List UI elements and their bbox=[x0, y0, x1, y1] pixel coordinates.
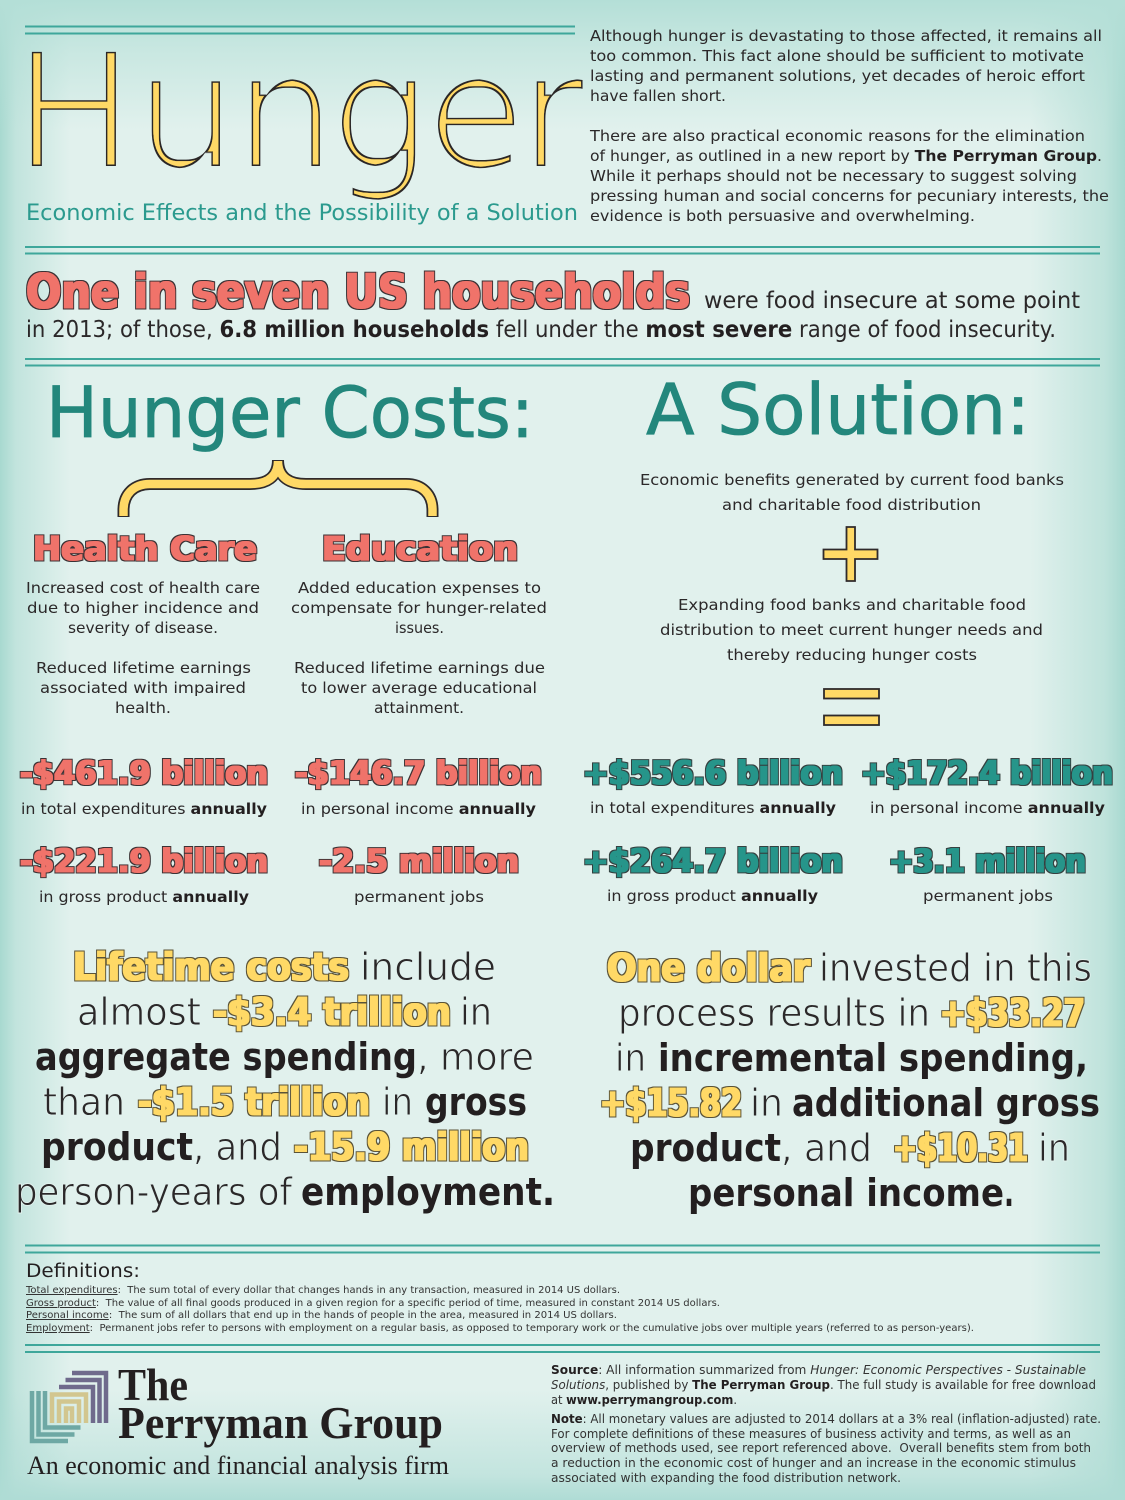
expansion text: Expanding food banks and charitable food bbox=[678, 596, 1026, 614]
callout: lifetime costs: in bbox=[460, 990, 492, 1034]
heading: Hunger Costs: Hunger Costs: bbox=[46, 372, 534, 454]
education description: to lower average educational bbox=[301, 679, 537, 697]
stat: personal income cost bbox=[295, 754, 542, 818]
source and note: at www.perrymangroup.com. bbox=[551, 1393, 737, 1407]
definition list: Total expenditures: The sum total of every dollar that changes hands in any transaction, measured in 2014 US dollars. bbox=[25, 1285, 620, 1296]
stat: gross product gain: in gross product annually bbox=[607, 887, 818, 905]
source and note: Solutions, published by The Perryman Group. The full study is available for free download bbox=[551, 1378, 1096, 1392]
health care description: severity of disease. bbox=[68, 619, 218, 637]
callout: lifetime costs: person-years of bbox=[15, 1170, 294, 1214]
health care description: Reduced lifetime earnings bbox=[36, 659, 251, 677]
education description: compensate for hunger-related bbox=[291, 599, 547, 617]
callout: one dollar: +$33.27 bbox=[940, 991, 1085, 1035]
callout: one dollar: +$15.82 bbox=[600, 1081, 742, 1125]
definition list: Personal income: The sum of all dollars that end up in the hands of people in the area, measured in 2014 US dollars. bbox=[26, 1310, 617, 1321]
stat: total expenditures gain: in total expenditures annually bbox=[590, 799, 836, 817]
title: Hunger: Hunger bbox=[13, 19, 586, 207]
subtitle: Economic Effects and the Possibility of a Solution bbox=[26, 200, 578, 226]
callout: lifetime costs bbox=[15, 945, 555, 1214]
intro text block: evidence is both persuasive and overwhelming. bbox=[590, 207, 975, 225]
definition list: Employment: Permanent jobs refer to persons with employment on a regular basis, as opposed to temporary work or the cumulative jobs over multiple years (referred to as person-years). bbox=[26, 1323, 974, 1334]
stat: total expenditures cost: -$461.9 billion bbox=[20, 754, 268, 792]
stat: personal income gain bbox=[861, 754, 1113, 817]
callout: lifetime costs: -$3.4 trillion bbox=[213, 990, 451, 1034]
wordmark: The bbox=[118, 1360, 188, 1410]
intro text block: lasting and permanent solutions, yet decades of heroic effort bbox=[590, 67, 1085, 85]
intro text block: While it perhaps should not be necessary to suggest solving bbox=[590, 167, 1077, 185]
expansion text: distribution to meet current hunger needs and bbox=[660, 621, 1043, 639]
callout: lifetime costs: than bbox=[43, 1080, 125, 1124]
logo: The Perryman Group bbox=[27, 1360, 449, 1480]
education description bbox=[291, 579, 547, 717]
education description: attainment. bbox=[374, 699, 464, 717]
icon: plus bbox=[824, 527, 878, 581]
wordmark bbox=[27, 1360, 449, 1480]
expansion text bbox=[660, 596, 1043, 664]
callout: lifetime costs: in bbox=[382, 1080, 413, 1124]
stat: total expenditures cost: in total expenditures annually bbox=[21, 800, 267, 818]
wordmark: Perryman Group bbox=[118, 1398, 443, 1448]
stat: gross product gain bbox=[583, 842, 843, 905]
headline statistic: were food insecure at some point bbox=[704, 288, 1080, 314]
callout: one dollar: process results in bbox=[618, 991, 930, 1035]
stat: jobs cost: permanent jobs bbox=[354, 888, 484, 906]
panel: hunger costs bbox=[15, 372, 555, 1214]
wordmark: An economic and financial analysis firm bbox=[27, 1451, 449, 1480]
source and note: overview of methods used, see report referenced above. Overall benefits stem from both bbox=[551, 1441, 1091, 1455]
education description: issues. bbox=[395, 619, 444, 637]
callout: lifetime costs: aggregate spending bbox=[35, 1035, 417, 1079]
callout: lifetime costs: , more bbox=[417, 1035, 534, 1079]
stat: personal income cost: -$146.7 billion bbox=[295, 754, 542, 792]
intro text block: of hunger, as outlined in a new report by The Perryman Group. bbox=[590, 147, 1102, 165]
callout: lifetime costs: -$1.5 trillion bbox=[138, 1080, 370, 1124]
stat: gross product cost: in gross product annually bbox=[39, 888, 249, 906]
callout: lifetime costs: include bbox=[360, 945, 496, 989]
definition list bbox=[25, 1285, 974, 1334]
callout: one dollar: personal income bbox=[688, 1171, 1004, 1215]
health care description: associated with impaired bbox=[40, 679, 246, 697]
stat: personal income gain: in personal income annually bbox=[870, 799, 1105, 817]
callout: lifetime costs: gross bbox=[425, 1080, 527, 1124]
icon: brace bbox=[124, 460, 432, 517]
stat: jobs cost bbox=[319, 842, 519, 906]
stat: total expenditures gain bbox=[583, 754, 843, 817]
expansion text: thereby reducing hunger costs bbox=[727, 646, 977, 664]
intro text block bbox=[589, 27, 1109, 225]
definition list: Gross product: The value of all final goods produced in a given region for a specific period of time, measured in constant 2014 US dollars. bbox=[26, 1298, 720, 1309]
health care description bbox=[26, 579, 260, 717]
stat: gross product cost bbox=[20, 842, 268, 906]
benefits text: Economic benefits generated by current food banks bbox=[640, 471, 1064, 489]
callout: one dollar: , and bbox=[781, 1126, 872, 1170]
callout: lifetime costs: -15.9 million bbox=[294, 1125, 529, 1169]
callout: lifetime costs: product bbox=[41, 1125, 193, 1169]
intro text block: Although hunger is devastating to those affected, it remains all bbox=[590, 27, 1102, 45]
source and note: a reduction in the economic cost of hunger and an increase in the economic stimulus bbox=[551, 1456, 1076, 1470]
icon: nested squares bbox=[32, 1373, 106, 1441]
callout: one dollar: . bbox=[1004, 1171, 1014, 1215]
stat: jobs cost: -2.5 million bbox=[319, 842, 519, 880]
callout: one dollar: incremental spending, bbox=[658, 1036, 1088, 1080]
health care description: due to higher incidence and bbox=[27, 599, 259, 617]
intro text block: too common. This fact alone should be sufficient to motivate bbox=[590, 47, 1084, 65]
heading: Health Care: Health Care bbox=[33, 529, 257, 568]
source and note bbox=[551, 1363, 1101, 1485]
source and note: For complete definitions of these measures of business activity and terms, as well as an bbox=[551, 1427, 1071, 1441]
callout: lifetime costs: Lifetime costs bbox=[73, 945, 349, 989]
panel: definitions bbox=[25, 1261, 974, 1334]
stat: total expenditures cost bbox=[20, 754, 268, 818]
headline statistic bbox=[26, 265, 1080, 343]
callout: lifetime costs: , and bbox=[193, 1125, 282, 1169]
panel: a solution bbox=[583, 369, 1113, 1215]
stat: gross product cost: -$221.9 billion bbox=[20, 842, 268, 880]
callout: one dollar: +$10.31 bbox=[893, 1126, 1028, 1170]
callout: one dollar: in bbox=[750, 1081, 783, 1125]
callout: one dollar: in bbox=[615, 1036, 646, 1080]
stat: jobs gain: permanent jobs bbox=[923, 887, 1053, 905]
callout: one dollar: One dollar bbox=[607, 946, 810, 990]
stat: personal income cost: in personal income annually bbox=[301, 800, 536, 818]
intro text block: There are also practical economic reasons for the elimination bbox=[589, 127, 1085, 145]
benefits text: and charitable food distribution bbox=[722, 496, 981, 514]
intro text block: have fallen short. bbox=[590, 87, 726, 105]
callout: one dollar: in bbox=[1038, 1126, 1070, 1170]
benefits text bbox=[640, 471, 1064, 514]
stat: gross product gain: +$264.7 billion bbox=[583, 842, 843, 880]
icon: equals bbox=[824, 689, 879, 725]
health care description: health. bbox=[115, 699, 171, 717]
callout: one dollar: product bbox=[630, 1126, 781, 1170]
stat: jobs gain bbox=[889, 842, 1086, 905]
headline statistic: One in seven US households bbox=[26, 265, 690, 320]
stat: total expenditures gain: +$556.6 billion bbox=[583, 754, 843, 792]
education description: Added education expenses to bbox=[298, 579, 541, 597]
intro text block: pressing human and social concerns for pecuniary interests, the bbox=[590, 187, 1109, 205]
callout: one dollar: invested in this bbox=[819, 946, 1092, 990]
callout: lifetime costs: employment. bbox=[301, 1170, 555, 1214]
source and note: associated with expanding the food distribution network. bbox=[551, 1471, 901, 1485]
source and note: Source: All information summarized from Hunger: Economic Perspectives - Sustainable bbox=[551, 1363, 1086, 1377]
heading: Education: Education bbox=[322, 529, 518, 568]
callout: lifetime costs: almost bbox=[77, 990, 201, 1034]
stat: jobs gain: +3.1 million bbox=[889, 842, 1086, 880]
heading: Definitions: Definitions: bbox=[26, 1261, 140, 1282]
education description: Reduced lifetime earnings due bbox=[294, 659, 545, 677]
source and note: Note: All monetary values are adjusted to 2014 dollars at a 3% real (inflation-adjusted) rate. bbox=[551, 1412, 1101, 1426]
heading: A Solution: A Solution: bbox=[646, 369, 1030, 451]
callout: one dollar bbox=[600, 946, 1100, 1215]
health care description: Increased cost of health care bbox=[26, 579, 260, 597]
headline statistic: in 2013; of those, 6.8 million households fell under the most severe range of food insecurity. bbox=[26, 317, 1056, 343]
